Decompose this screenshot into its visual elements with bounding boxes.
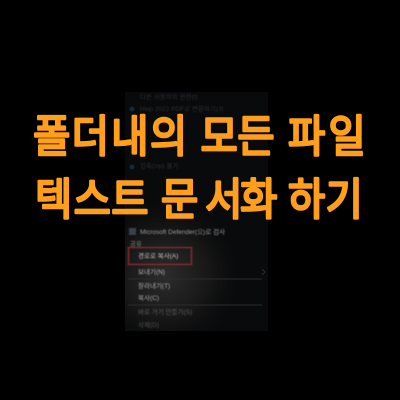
menu separators — [128, 279, 262, 305]
icon: submenu arrow — [262, 269, 265, 275]
menu items: 삭제(D) — [138, 320, 159, 329]
menu items: 압축(zip) 풀기 — [140, 161, 178, 170]
menu items: Hwp 2022 PDF로 변환하기(J) — [140, 104, 223, 113]
menu items: 공유 — [130, 240, 142, 248]
title line 1: 폴더내의 모든 파일 — [33, 112, 366, 161]
menu items: 잘라내기(T) — [138, 281, 170, 290]
title — [33, 112, 366, 224]
menu items: 보내기(N) — [138, 267, 165, 276]
menu items: 바로 가기 만들기(S) — [138, 307, 192, 316]
menu items: Microsoft Defender(으)로 검사 — [140, 227, 225, 236]
title line 2: 텍스트 문서화 하기 — [35, 175, 363, 224]
menu items: 복사(C) — [138, 293, 159, 302]
menu items: 경로로 복사(A) — [138, 251, 178, 260]
menu items — [129, 92, 225, 329]
menu items: 다른 사용자의 권한(I) — [140, 92, 198, 101]
panel: context menu screenshot — [125, 92, 268, 331]
highlight: red box — [128, 248, 192, 264]
